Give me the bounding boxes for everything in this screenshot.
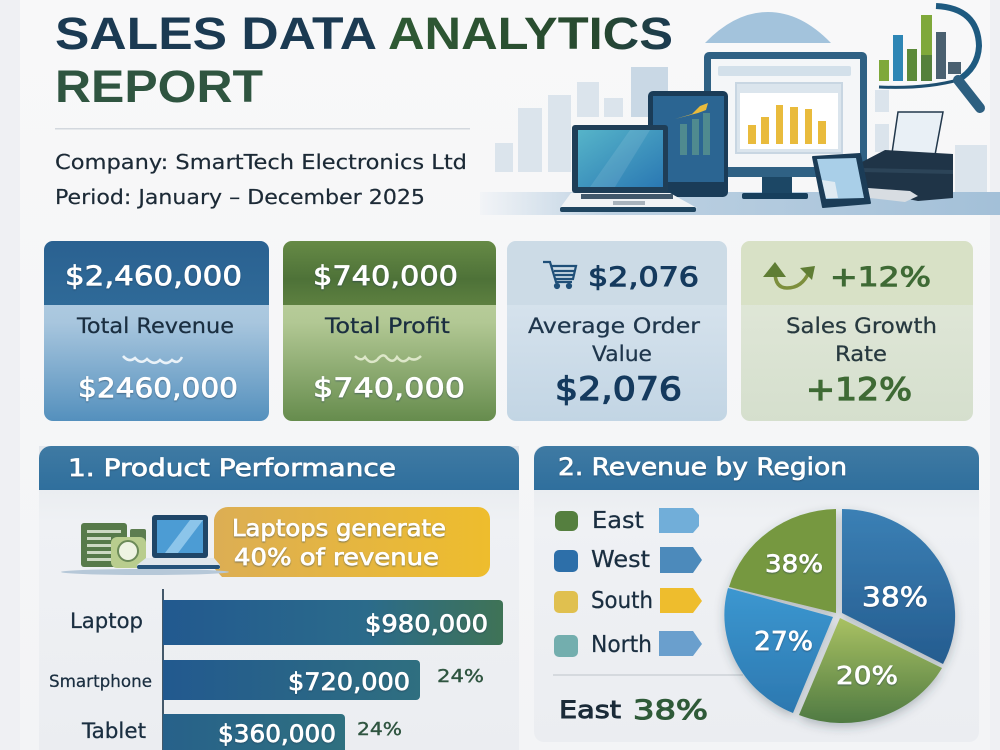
company and period details bbox=[55, 150, 467, 209]
company and period details: Company: SmartTech Electronics Ltd bbox=[55, 150, 467, 174]
panel: average order value card: Average Order bbox=[528, 314, 700, 338]
legend: North bbox=[591, 632, 652, 658]
company and period details: Period: January – December 2025 bbox=[55, 185, 425, 209]
heading: product performance bbox=[39, 446, 519, 490]
panel: total profit card: $740,000 bbox=[313, 373, 465, 404]
panel: sales growth rate card bbox=[741, 241, 973, 421]
bar: laptop: $980,000 bbox=[365, 610, 488, 638]
bar: smartphone bbox=[49, 660, 484, 700]
callout: laptops generate 40% of revenue bbox=[214, 507, 490, 577]
panel: total revenue card: Total Revenue bbox=[76, 314, 234, 338]
icon: growth arrows bbox=[763, 262, 815, 288]
panel: total revenue card: $2460,000 bbox=[78, 373, 238, 404]
icon: products and laptop bbox=[61, 515, 229, 575]
panel: sales growth rate card: +12% bbox=[806, 372, 912, 408]
bar: smartphone: $720,000 bbox=[288, 668, 410, 696]
panel: average order value card bbox=[507, 241, 727, 421]
pie chart: revenue share: 20% bbox=[836, 661, 898, 690]
legend: West bbox=[591, 547, 650, 573]
icon: shopping cart bbox=[543, 262, 576, 288]
panel: total revenue card: $2,460,000 bbox=[65, 261, 242, 292]
panel: total profit card: $740,000 bbox=[313, 261, 458, 292]
legend: South bbox=[591, 588, 653, 614]
pie chart: revenue share: 27% bbox=[754, 627, 813, 657]
pie chart: revenue share: 38% bbox=[765, 550, 823, 578]
heading: revenue by region bbox=[534, 446, 979, 490]
bar: smartphone: Smartphone bbox=[49, 672, 152, 692]
summary: east 38% bbox=[559, 695, 708, 726]
bar: tablet: $360,000 bbox=[218, 720, 336, 748]
hero illustration: devices bbox=[480, 12, 1000, 215]
heading: product performance: 1. Product Performance bbox=[68, 454, 396, 482]
title: ANALYTICS bbox=[388, 8, 673, 59]
title: SALES DATA bbox=[55, 8, 377, 59]
bar: tablet: 24% bbox=[357, 719, 402, 740]
summary: east 38%: 38% bbox=[633, 695, 708, 726]
panel: average order value card: $2,076 bbox=[555, 370, 682, 408]
heading: revenue by region: 2. Revenue by Region bbox=[558, 453, 847, 481]
callout: laptops generate 40% of revenue: Laptops generate bbox=[232, 516, 446, 542]
panel: sales growth rate card: Rate bbox=[835, 342, 887, 366]
legend bbox=[554, 508, 702, 658]
panel: average order value card: Value bbox=[592, 342, 652, 366]
title bbox=[55, 8, 673, 112]
bar: laptop bbox=[70, 600, 503, 645]
panel: total profit card: Total Profit bbox=[324, 314, 450, 338]
panel: total profit card bbox=[283, 241, 496, 421]
panel: sales growth rate card: +12% bbox=[830, 262, 931, 293]
bar chart: product revenue bbox=[49, 600, 503, 750]
bar: tablet bbox=[81, 714, 402, 750]
pie chart: revenue share: 38% bbox=[862, 582, 928, 613]
callout: laptops generate 40% of revenue: 40% of revenue bbox=[234, 545, 439, 571]
panel: revenue by region bbox=[534, 446, 979, 742]
summary: east 38%: East bbox=[559, 696, 621, 724]
pie chart: revenue share bbox=[724, 509, 955, 723]
panel: total revenue card bbox=[44, 241, 269, 421]
bar: laptop: Laptop bbox=[70, 609, 143, 633]
bar: tablet: Tablet bbox=[81, 719, 146, 743]
panel: product performance bbox=[39, 446, 519, 750]
panel: sales growth rate card: Sales Growth bbox=[786, 314, 937, 338]
panel: average order value card: $2,076 bbox=[588, 262, 699, 293]
bar: smartphone: 24% bbox=[437, 666, 484, 687]
title: REPORT bbox=[55, 61, 263, 112]
icon: magnifier over bar chart bbox=[879, 6, 980, 108]
legend: East bbox=[592, 508, 644, 534]
